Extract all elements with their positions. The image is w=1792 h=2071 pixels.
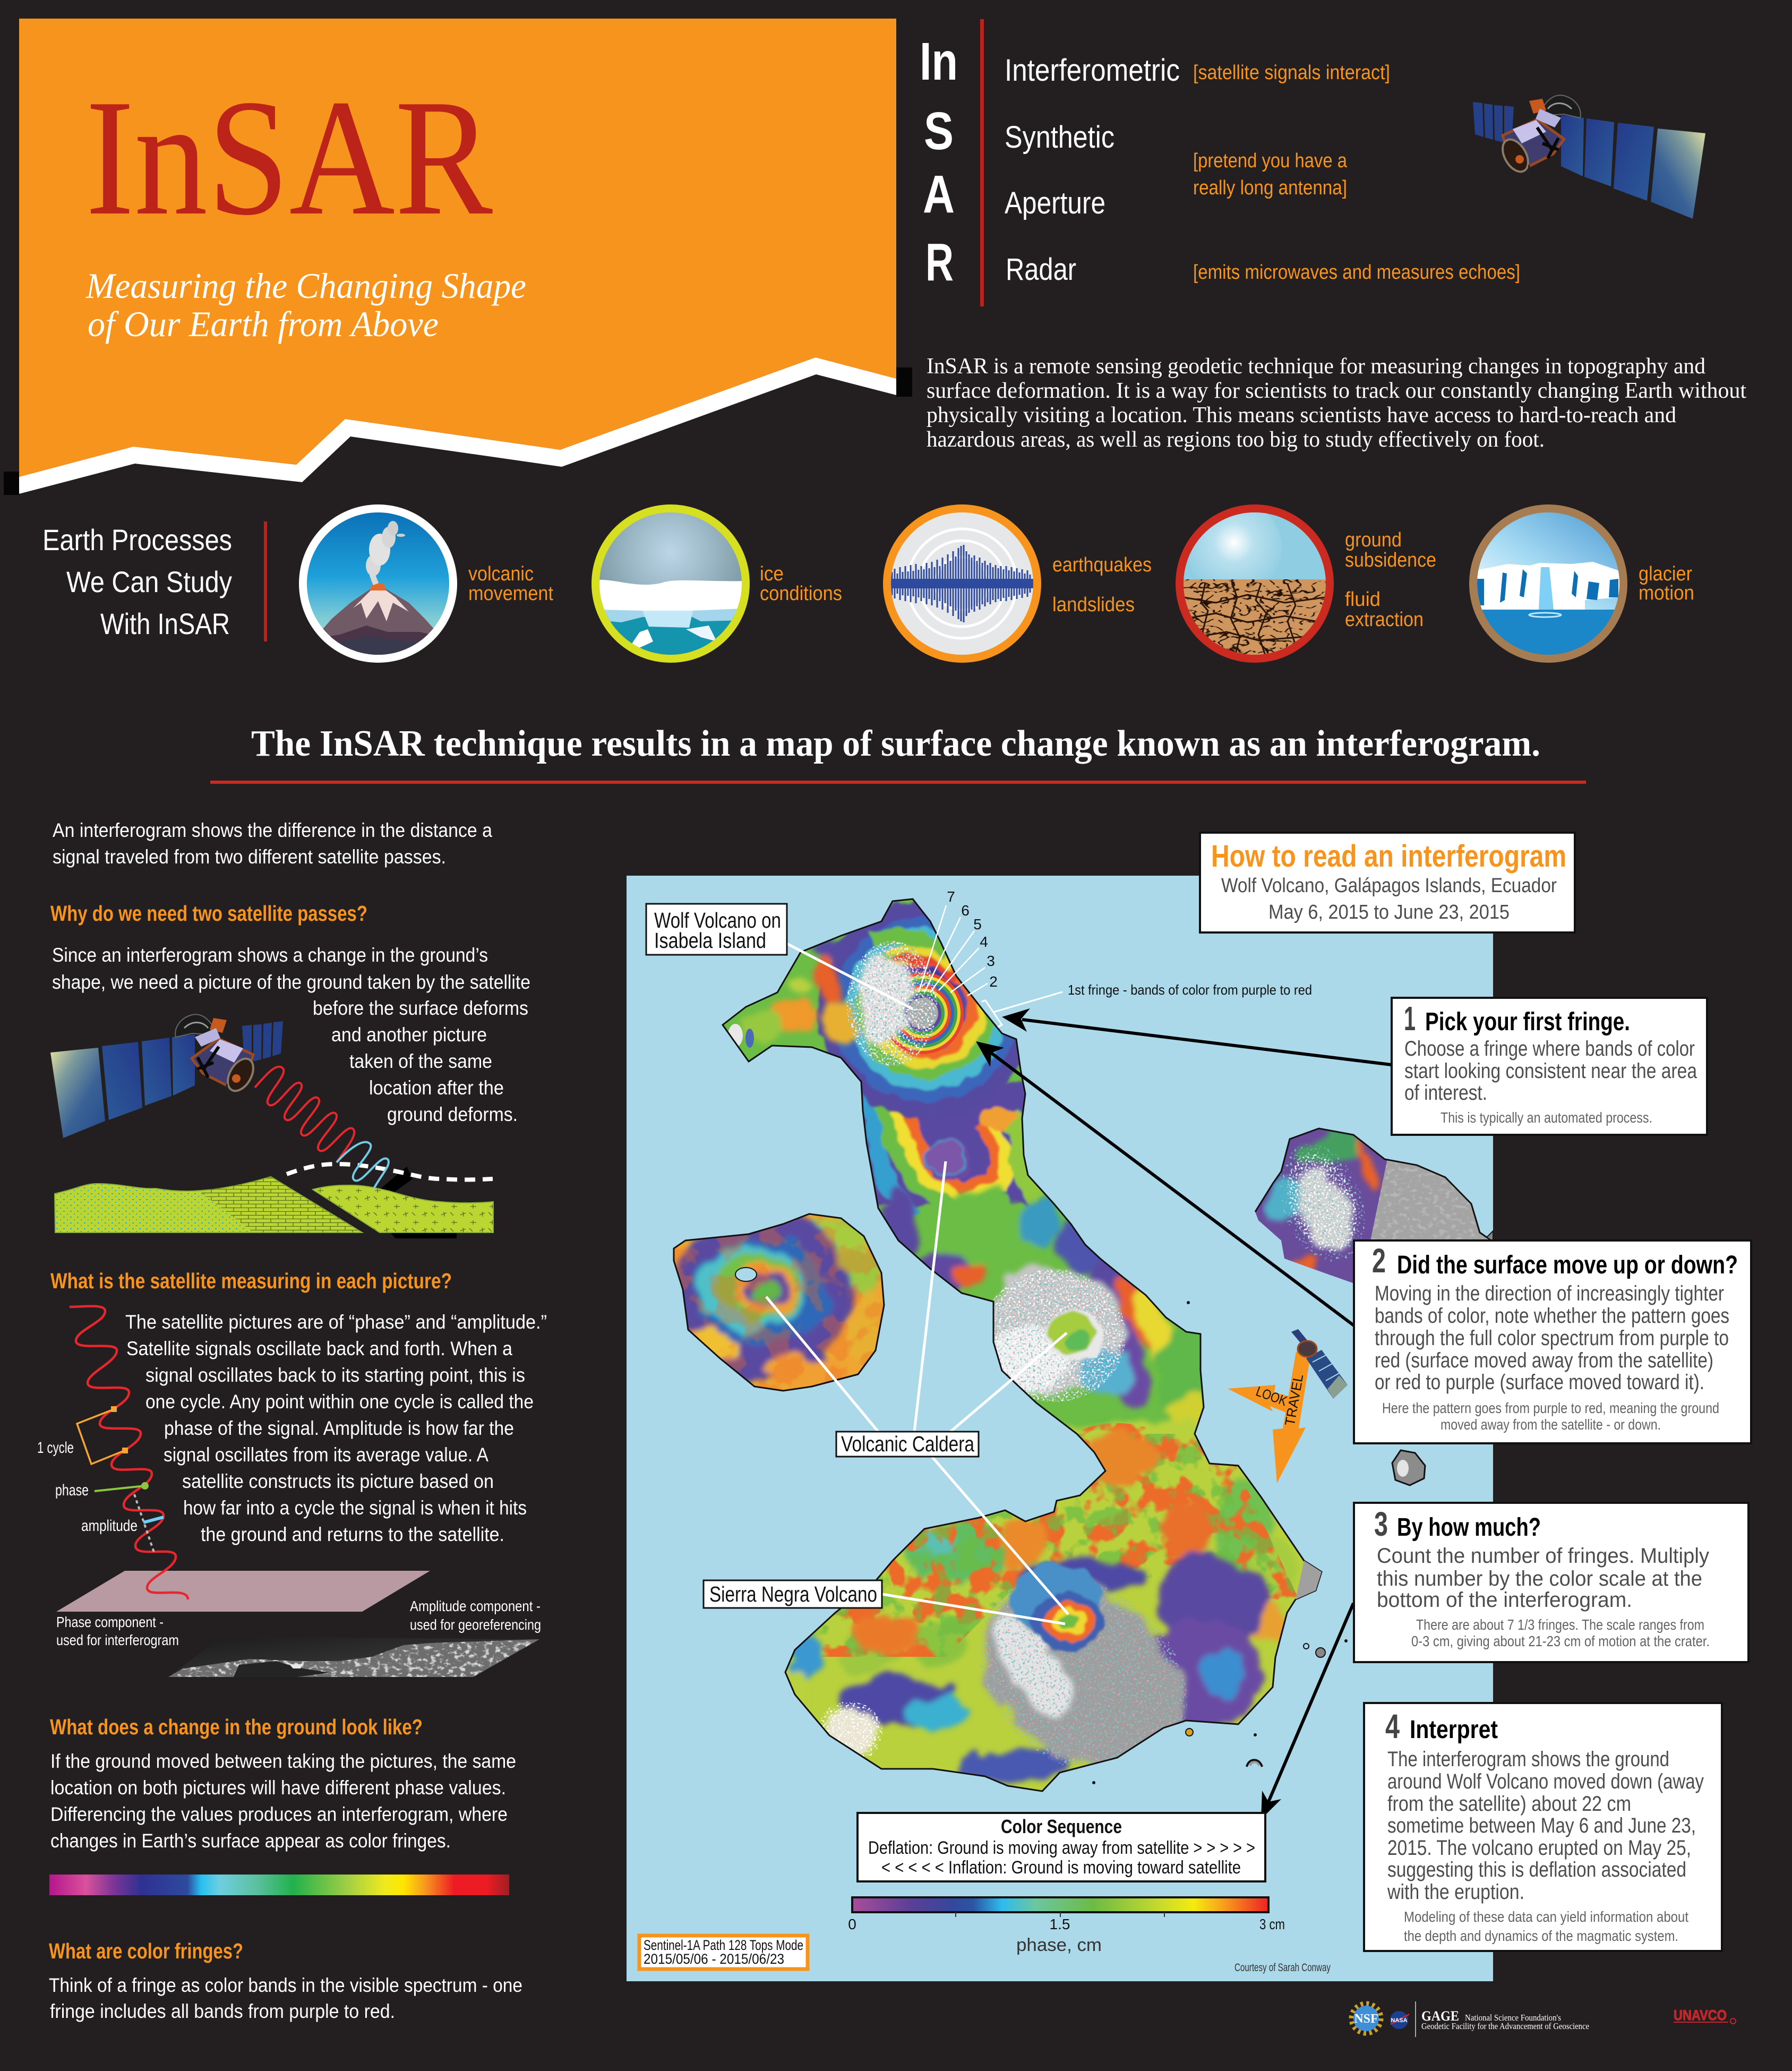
panel: step 1: of interest. (1404, 1081, 1487, 1105)
scale tick labels: 0 (848, 1916, 856, 1932)
Darwin area (850, 1082, 1041, 1216)
acronym panel (920, 19, 1520, 306)
text: two passes explanation: location after the (369, 1077, 504, 1099)
heading: color fringes: What are color fringes? (49, 1939, 243, 1963)
panel: step 4: The interferogram shows the ground (1387, 1748, 1669, 1771)
text: two passes explanation: ground deforms. (387, 1103, 518, 1125)
panel: step 2: bands of color, note whether the pattern goes (1375, 1304, 1729, 1328)
text: phase and amplitude: phase of the signal. Amplitude is how far the (164, 1417, 514, 1439)
arrow: step 1 to first fringe (1002, 1008, 1391, 1065)
panel: step 4: suggesting this is deflation associated (1387, 1858, 1686, 1881)
text: phase and amplitude: signal oscillates back to its starting point, this is (145, 1364, 525, 1386)
data source label: Sentinel-1A Path 128 Tops Mode (644, 1937, 803, 1953)
acronym letters: S (924, 101, 954, 161)
callout: Wolf Volcano (646, 904, 787, 955)
label: ground subsidence and fluid extraction: extraction (1345, 609, 1424, 631)
label: ground subsidence and fluid extraction: fluid (1345, 588, 1381, 611)
look and travel arrows (1228, 1351, 1310, 1483)
left intro text: signal traveled from two different satellite passes. (53, 846, 446, 868)
text: phase and amplitude (125, 1311, 547, 1545)
logo: UNAVCO: UNAVCO (1674, 2007, 1727, 2023)
text: phase and amplitude: satellite constructs its picture based on (182, 1470, 494, 1492)
logo: NSF (1351, 2004, 1381, 2033)
heading: change in the ground: What does a change in the ground look like? (50, 1715, 423, 1739)
speckle: south caldera (939, 1535, 1227, 1817)
intro text: hazardous areas, as well as regions too big to study effectively on foot. (927, 427, 1545, 452)
label: glacier motion (1639, 563, 1694, 604)
island: Santa Cruz side island (1242, 1115, 1497, 1338)
south base (743, 1423, 1327, 1800)
label: look: LOOK (1254, 1383, 1290, 1409)
north tip bands (871, 937, 945, 956)
text: phase and amplitude: The satellite pictures are of “phase” and “amplitude.” (125, 1311, 547, 1333)
fringe numbers: 2 (989, 973, 998, 990)
text: phase and amplitude: one cycle. Any point within one cycle is called the (145, 1391, 534, 1413)
panel: phase plane (56, 1571, 430, 1612)
label: ice conditions: conditions (760, 583, 842, 605)
text: phase and amplitude: the ground and returns to the satellite. (201, 1524, 504, 1545)
panel: step 2: Here the pattern goes from purple to red, meaning the ground (1382, 1400, 1719, 1416)
icon: volcano (299, 504, 457, 663)
panel: step 2: red (surface moved away from the satellite) (1375, 1349, 1713, 1372)
acronym words: Interferometric (1005, 53, 1180, 88)
section headline (210, 723, 1586, 784)
acronym words: Synthetic (1005, 120, 1114, 155)
label: amplitude component (410, 1598, 541, 1633)
panel: step 2: moved away from the satellite - or down. (1441, 1416, 1661, 1433)
panel: step 3: Count the number of fringes. Multiply (1377, 1544, 1709, 1568)
acronym notes: [pretend you have a (1193, 150, 1348, 172)
logo: NASA: NASA (1391, 2017, 1408, 2024)
subtitle (85, 266, 526, 344)
intro text: surface deformation. It is a way for scientists to track our constantly changing Earth without (927, 379, 1746, 403)
Alcedo crater (1045, 1310, 1104, 1361)
label: ground subsidence and fluid extraction: subsidence (1345, 549, 1436, 571)
panel: step 4: with the eruption. (1387, 1880, 1524, 1904)
diagram: radar wave and deforming ground (55, 1067, 493, 1238)
acronym letters: R (925, 233, 954, 292)
acronym letters: In (920, 32, 958, 91)
text: change explanation: If the ground moved between taking the pictures, the same (50, 1750, 516, 1772)
logo: NSF: NSF (1354, 2012, 1378, 2026)
panel: step 2 (1354, 1240, 1751, 1443)
callout: Sierra Negra Volcano: Sierra Negra Volcano (709, 1582, 877, 1606)
panel: step 3 (1354, 1503, 1748, 1662)
Wolf tight rings (884, 974, 962, 1052)
label: 1st fringe: 1st fringe - bands of color from purple to red (1068, 982, 1312, 998)
acronym words: Aperture (1005, 186, 1105, 220)
label: phase component: Phase component - (56, 1614, 164, 1630)
callout leader lines (766, 944, 1068, 1624)
Alcedo region (1109, 1272, 1174, 1362)
text: change explanation: location on both pictures will have different phase values. (50, 1777, 506, 1799)
icon: satellite (1473, 95, 1705, 219)
acronym words (1005, 53, 1180, 287)
icon: satellite over ground (50, 1014, 283, 1138)
panel: step 3: 0-3 cm, giving about 21-23 cm of motion at the crater. (1411, 1633, 1710, 1649)
callout: Wolf Volcano: Isabela Island (654, 928, 766, 953)
acronym notes: [emits microwaves and measures echoes] (1193, 261, 1520, 284)
text: change explanation: Differencing the values produces an interferogram, where (50, 1803, 508, 1825)
panel: amplitude plane (168, 1637, 539, 1677)
arrow: step 2 to fringe pattern (976, 1041, 1354, 1326)
neck (934, 1195, 1041, 1269)
acronym notes: really long antenna] (1193, 177, 1347, 199)
panel: step 1: 1 (1404, 999, 1416, 1038)
fringe numbers (947, 888, 998, 990)
diagram: signal wave with cycle, phase and amplitude (37, 1306, 188, 1599)
icon: dry cracked ground (1176, 500, 1334, 663)
icon: glacier (1469, 504, 1627, 663)
panel: step 4: Interpret (1410, 1716, 1498, 1744)
arrow: step 3 to color scale (1261, 1603, 1353, 1819)
panel: step 4: the depth and dynamics of the magmatic system. (1404, 1928, 1678, 1944)
label: glacier motion: glacier (1639, 563, 1692, 585)
logo: GAGE: Geodetic Facility for the Advancement of Geoscience (1421, 2021, 1589, 2031)
panel: step 3: bottom of the interferogram. (1377, 1588, 1632, 1612)
label: amplitude: amplitude (81, 1517, 138, 1535)
panel: how to read: How to read an interferogram (1211, 839, 1566, 874)
island: Isabela interferogram (711, 892, 1333, 1817)
subtitle: of Our Earth from Above (88, 304, 439, 344)
title banner (4, 19, 912, 495)
logo: GAGE: National Science Foundation's (1465, 2013, 1561, 2023)
panel: step 1: Pick your first fringe. (1425, 1008, 1630, 1036)
color scale (848, 1897, 1285, 1955)
fringe number leader lines (919, 905, 988, 996)
credit: Courtesy of Sarah Conway (1234, 1962, 1331, 1974)
label: volcanic movement: volcanic (468, 563, 534, 585)
label: volcanic movement: movement (468, 583, 553, 605)
island: Fernandina (664, 1205, 892, 1397)
intro text: physically visiting a location. This means scientists have access to hard-to-reach and (927, 403, 1676, 427)
callout: Volcanic Caldera: Volcanic Caldera (841, 1432, 974, 1456)
Wolf outer rings (818, 900, 1035, 1118)
panel: step 2: 2 (1372, 1242, 1386, 1280)
label: earthquakes and landslides: landslides (1052, 594, 1135, 616)
panel: step 1: start looking consistent near the area (1404, 1059, 1697, 1083)
panel: step 3: 3 (1374, 1505, 1388, 1543)
label: phase component (56, 1614, 179, 1648)
panel: step 4 (1364, 1703, 1722, 1951)
title: InSAR (85, 65, 493, 250)
panel: step 1: Choose a fringe where bands of color (1404, 1037, 1695, 1060)
scale tick labels (848, 1916, 1285, 1932)
label: earthquakes and landslides (1052, 554, 1152, 616)
logo: NASA (1390, 2011, 1409, 2029)
spectrum bar (49, 1875, 509, 1895)
panel: step 2: Moving in the direction of increasingly tighter (1375, 1282, 1724, 1305)
text: two passes explanation (52, 944, 530, 1125)
text: two passes explanation: shape, we need a picture of the ground taken by the satellite (52, 971, 530, 993)
label: volcanic movement (468, 563, 553, 605)
panel: color sequence: Deflation: Ground is moving away from satellite > > > > > (868, 1838, 1255, 1858)
earth processes heading: With InSAR (100, 607, 230, 640)
earth processes heading: We Can Study (66, 565, 232, 598)
Sierra Negra rings (1010, 1563, 1104, 1650)
text: color fringes (49, 1974, 522, 2022)
text: color fringes: Think of a fringe as color bands in the visible spectrum - one (49, 1974, 522, 1996)
data source label (639, 1936, 808, 1969)
text: two passes explanation: taken of the same (349, 1050, 492, 1072)
panel: step 3: There are about 7 1/3 fringes. The scale ranges from (1416, 1616, 1704, 1633)
fringe numbers: 6 (961, 902, 970, 919)
panel: step 2: or red to purple (surface moved toward it). (1375, 1371, 1704, 1394)
acronym words: Radar (1006, 252, 1076, 287)
earth processes heading: Earth Processes (42, 523, 232, 557)
panel: step 4: 4 (1385, 1707, 1400, 1745)
panel: step 4: Modeling of these data can yield information about (1404, 1909, 1688, 1925)
ground blocks (55, 1167, 493, 1238)
label: earthquakes and landslides: earthquakes (1052, 554, 1152, 576)
acronym notes: [satellite signals interact] (1193, 62, 1390, 84)
fringe numbers: 3 (987, 953, 995, 969)
acronym letters (920, 32, 958, 292)
logo: GAGE (1421, 2008, 1589, 2031)
mottled orange and green (743, 1434, 1301, 1657)
icon: small satellite (1291, 1329, 1348, 1399)
text: change explanation (50, 1750, 516, 1852)
icon: seismogram (883, 504, 1041, 663)
section headline: The InSAR technique results in a map of surface change known as an interferogram. (251, 723, 1540, 764)
panel: step 4: around Wolf Volcano moved down (away (1387, 1770, 1704, 1793)
scale tick labels: 1.5 (1050, 1916, 1070, 1932)
text: phase and amplitude: Satellite signals oscillate back and forth. When a (126, 1338, 512, 1359)
fringe numbers: 5 (973, 916, 982, 932)
text: color fringes: fringe includes all bands from purple to red. (50, 2000, 395, 2022)
icon: ice conditions (591, 475, 750, 664)
heading: two satellite passes: Why do we need two satellite passes? (50, 901, 367, 926)
scale title: phase, cm (1016, 1935, 1102, 1955)
scale tick labels: 3 cm (1259, 1916, 1285, 1932)
data source label: 2015/05/06 - 2015/06/23 (644, 1951, 784, 1967)
callout: Wolf Volcano: Wolf Volcano on (654, 908, 781, 932)
panel: step 4: 2015. The volcano erupted on May 25, (1387, 1836, 1691, 1860)
panel: step 3: By how much? (1397, 1513, 1541, 1542)
subtitle: Measuring the Changing Shape (85, 266, 526, 306)
label: phase: phase (55, 1482, 89, 1499)
panel: interferogram map (627, 833, 1751, 2037)
label: phase component: used for interferogram (56, 1632, 179, 1648)
fringe numbers: 7 (947, 888, 955, 905)
label: 1 cycle: 1 cycle (37, 1439, 74, 1457)
heading: what is measured: What is the satellite measuring in each picture? (50, 1269, 452, 1293)
left intro text: An interferogram shows the difference in the distance a (53, 819, 492, 841)
panel: color sequence (858, 1813, 1265, 1881)
fringe numbers: 4 (980, 934, 988, 950)
label: ground subsidence and fluid extraction (1345, 529, 1436, 631)
panel: color sequence: Color Sequence (1001, 1816, 1122, 1837)
earth processes heading (42, 521, 267, 641)
panel: step 3: this number by the color scale at the (1377, 1567, 1702, 1590)
panel: step 1: This is typically an automated process. (1441, 1109, 1652, 1126)
text: change explanation: changes in Earth’s surface appear as color fringes. (50, 1830, 451, 1852)
panel: how to read: May 6, 2015 to June 23, 2015 (1268, 901, 1510, 923)
label: ground subsidence and fluid extraction: ground (1345, 529, 1402, 551)
label: amplitude component: used for georeferencing (410, 1616, 541, 1633)
panel: step 4: sometime between May 6 and June 23, (1387, 1814, 1696, 1837)
intro text: InSAR is a remote sensing geodetic technique for measuring changes in topography and (927, 354, 1705, 379)
panel: how to read: Wolf Volcano, Galápagos Islands, Ecuador (1221, 875, 1557, 897)
label: 1st fringe (982, 982, 1312, 1027)
left intro text (53, 819, 492, 868)
text: two passes explanation: Since an interferogram shows a change in the ground’s (52, 944, 488, 966)
panel: step 2: through the full color spectrum from purple to (1375, 1327, 1729, 1350)
text: phase and amplitude: how far into a cycle the signal is when it hits (183, 1497, 527, 1519)
small islets (1092, 1231, 1493, 1784)
label: glacier motion: motion (1639, 582, 1694, 604)
acronym letters: A (923, 165, 955, 224)
panel: step 4: from the satellite) about 22 cm (1387, 1792, 1631, 1816)
logo: GAGE: GAGE (1421, 2008, 1459, 2024)
acronym notes (1193, 62, 1520, 284)
panel: color sequence: < < < < < Inflation: Ground is moving toward satellite (881, 1858, 1241, 1878)
label: ice conditions: ice (760, 563, 784, 585)
panel: how to read (1200, 833, 1575, 932)
intro text (927, 354, 1746, 452)
text: two passes explanation: before the surface deforms (313, 997, 528, 1019)
label: amplitude component: Amplitude component - (410, 1598, 541, 1614)
text: phase and amplitude: signal oscillates from its average value. A (164, 1444, 488, 1466)
label: ice conditions (760, 563, 842, 605)
panel: step 1 (1392, 998, 1707, 1135)
label: travel: TRAVEL (1282, 1373, 1306, 1427)
text: two passes explanation: and another picture (331, 1024, 487, 1046)
